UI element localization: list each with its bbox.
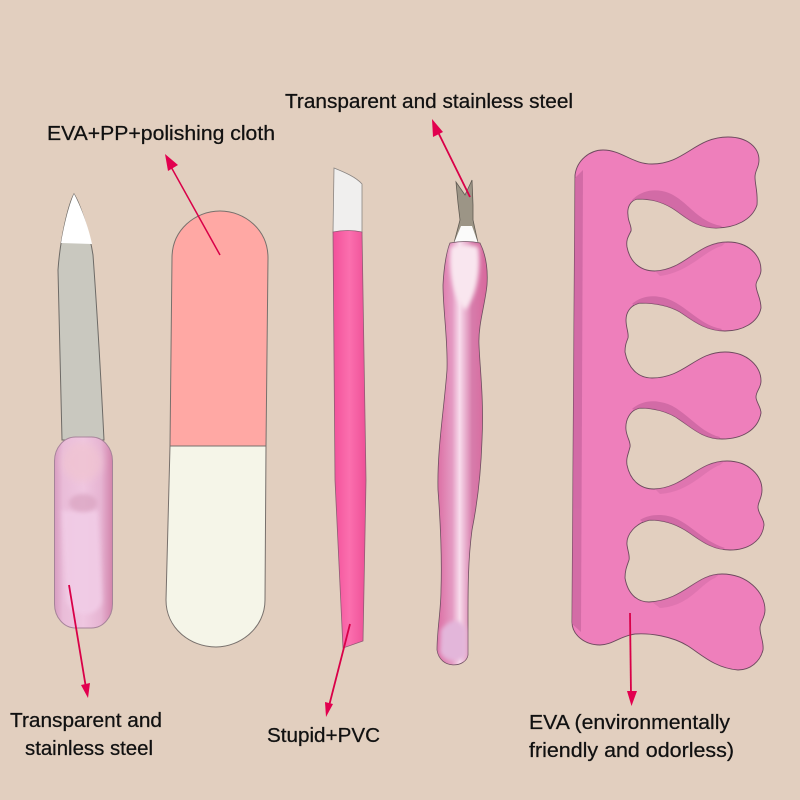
arrow: buffer to label xyxy=(165,154,220,255)
handle top reflection xyxy=(62,442,102,482)
nail file white tip xyxy=(61,194,92,244)
arrow: toe separator to label xyxy=(627,613,637,706)
arrow: stick to label xyxy=(325,624,350,717)
arrow: pusher to label xyxy=(432,119,470,197)
stick white tip xyxy=(333,168,362,233)
label: toe separator material: EVA (environmentally xyxy=(529,712,730,734)
toe separator shading xyxy=(570,170,728,632)
nail file handle xyxy=(54,437,112,628)
label: toe separator material xyxy=(529,712,734,762)
buffer white section xyxy=(166,446,266,647)
buffer pink section xyxy=(170,211,268,446)
stick pink body xyxy=(333,230,366,648)
pusher metal neck highlight xyxy=(454,226,478,243)
label: file material xyxy=(10,710,162,760)
label: toe separator material: friendly and odorless) xyxy=(529,740,734,762)
label: file material: stainless steel xyxy=(25,738,153,760)
label: file material: Transparent and xyxy=(10,710,162,732)
label: stick material: Stupid+PVC xyxy=(267,725,380,747)
buffer block xyxy=(166,211,268,647)
nail file blade xyxy=(58,194,104,440)
toe separator body xyxy=(572,137,765,670)
pusher metal fork xyxy=(454,180,478,243)
arrow: file to label xyxy=(69,585,90,698)
toe separator xyxy=(570,137,765,670)
pusher handle xyxy=(437,242,487,665)
nail file tool xyxy=(54,194,112,628)
label: pusher material: Transparent and stainless steel xyxy=(285,91,573,113)
infographic canvas xyxy=(10,92,766,762)
cuticle stick xyxy=(333,168,366,648)
cuticle pusher xyxy=(437,180,487,665)
pusher top highlight xyxy=(450,245,479,310)
pusher bottom highlight xyxy=(440,621,466,661)
label: buffer material: EVA+PP+polishing cloth xyxy=(47,123,275,145)
handle highlight xyxy=(62,510,102,614)
arrows xyxy=(69,119,637,717)
